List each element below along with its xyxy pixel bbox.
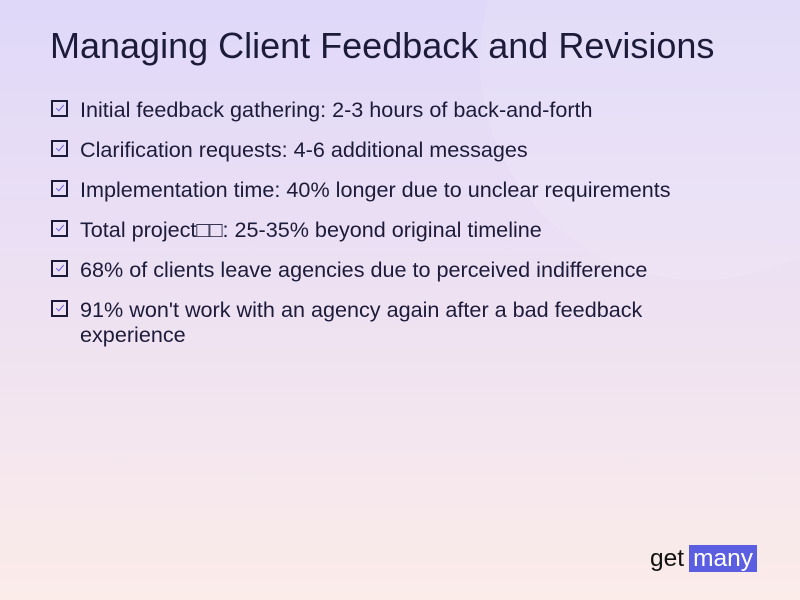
item 4: Total project□□: 25-35% beyond original timeline: [80, 217, 542, 242]
item 2: Clarification requests: 4-6 additional messages: [80, 137, 528, 162]
item 5: 68% of clients leave agencies due to perceived indifference: [80, 257, 647, 282]
logo: get many: [650, 545, 753, 572]
title: Managing Client Feedback and Revisions: [50, 25, 714, 66]
checklist: [51, 97, 671, 347]
item 6: 91% won't work with an agency again after a bad feedback experience: [80, 297, 642, 347]
item 1: Initial feedback gathering: 2-3 hours of back-and-forth: [80, 97, 593, 122]
item 3: Implementation time: 40% longer due to unclear requirements: [80, 177, 671, 202]
